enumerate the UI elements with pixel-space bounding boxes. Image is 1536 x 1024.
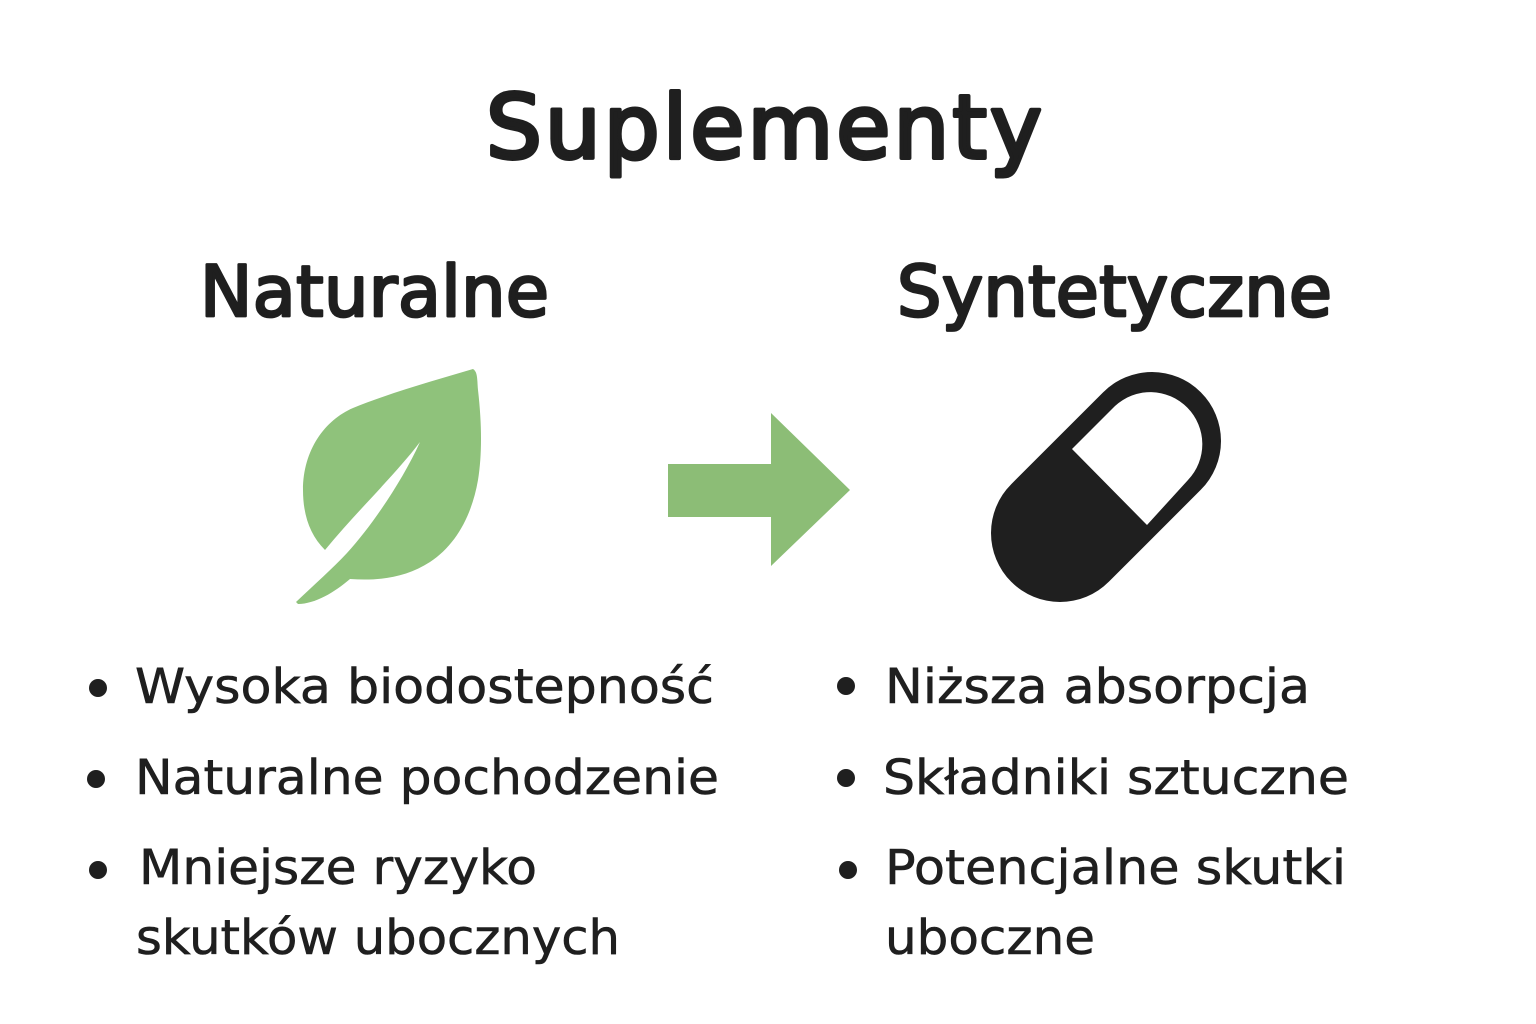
list: natural benefits	[87, 659, 719, 966]
bullet item 3: Potencjalne skutki	[885, 840, 1346, 896]
bullet item 3	[839, 840, 1346, 966]
title: Suplementy	[486, 76, 1042, 179]
bullet item 2: Naturalne pochodzenie	[135, 750, 719, 806]
bullet item 3: Mniejsze ryzyko	[139, 840, 537, 896]
bullet item 1: Niższa absorpcja	[885, 659, 1310, 715]
bullet item 3	[89, 840, 620, 966]
panel: natural supplements	[87, 251, 719, 966]
icon: leaf	[296, 369, 481, 604]
heading: Naturalne: Naturalne	[200, 251, 549, 333]
arrow	[668, 413, 850, 566]
bullet item 3: skutków ubocznych	[136, 910, 620, 966]
bullet item 1: Wysoka biodostepność	[135, 659, 714, 715]
icon: capsule	[1060, 392, 1202, 533]
heading: Syntetyczne: Syntetyczne	[897, 251, 1332, 333]
bullet item 3: uboczne	[885, 910, 1095, 966]
panel: synthetic supplements	[837, 251, 1349, 966]
bullet item 2: Składniki sztuczne	[883, 750, 1349, 806]
list: synthetic drawbacks	[837, 659, 1349, 966]
